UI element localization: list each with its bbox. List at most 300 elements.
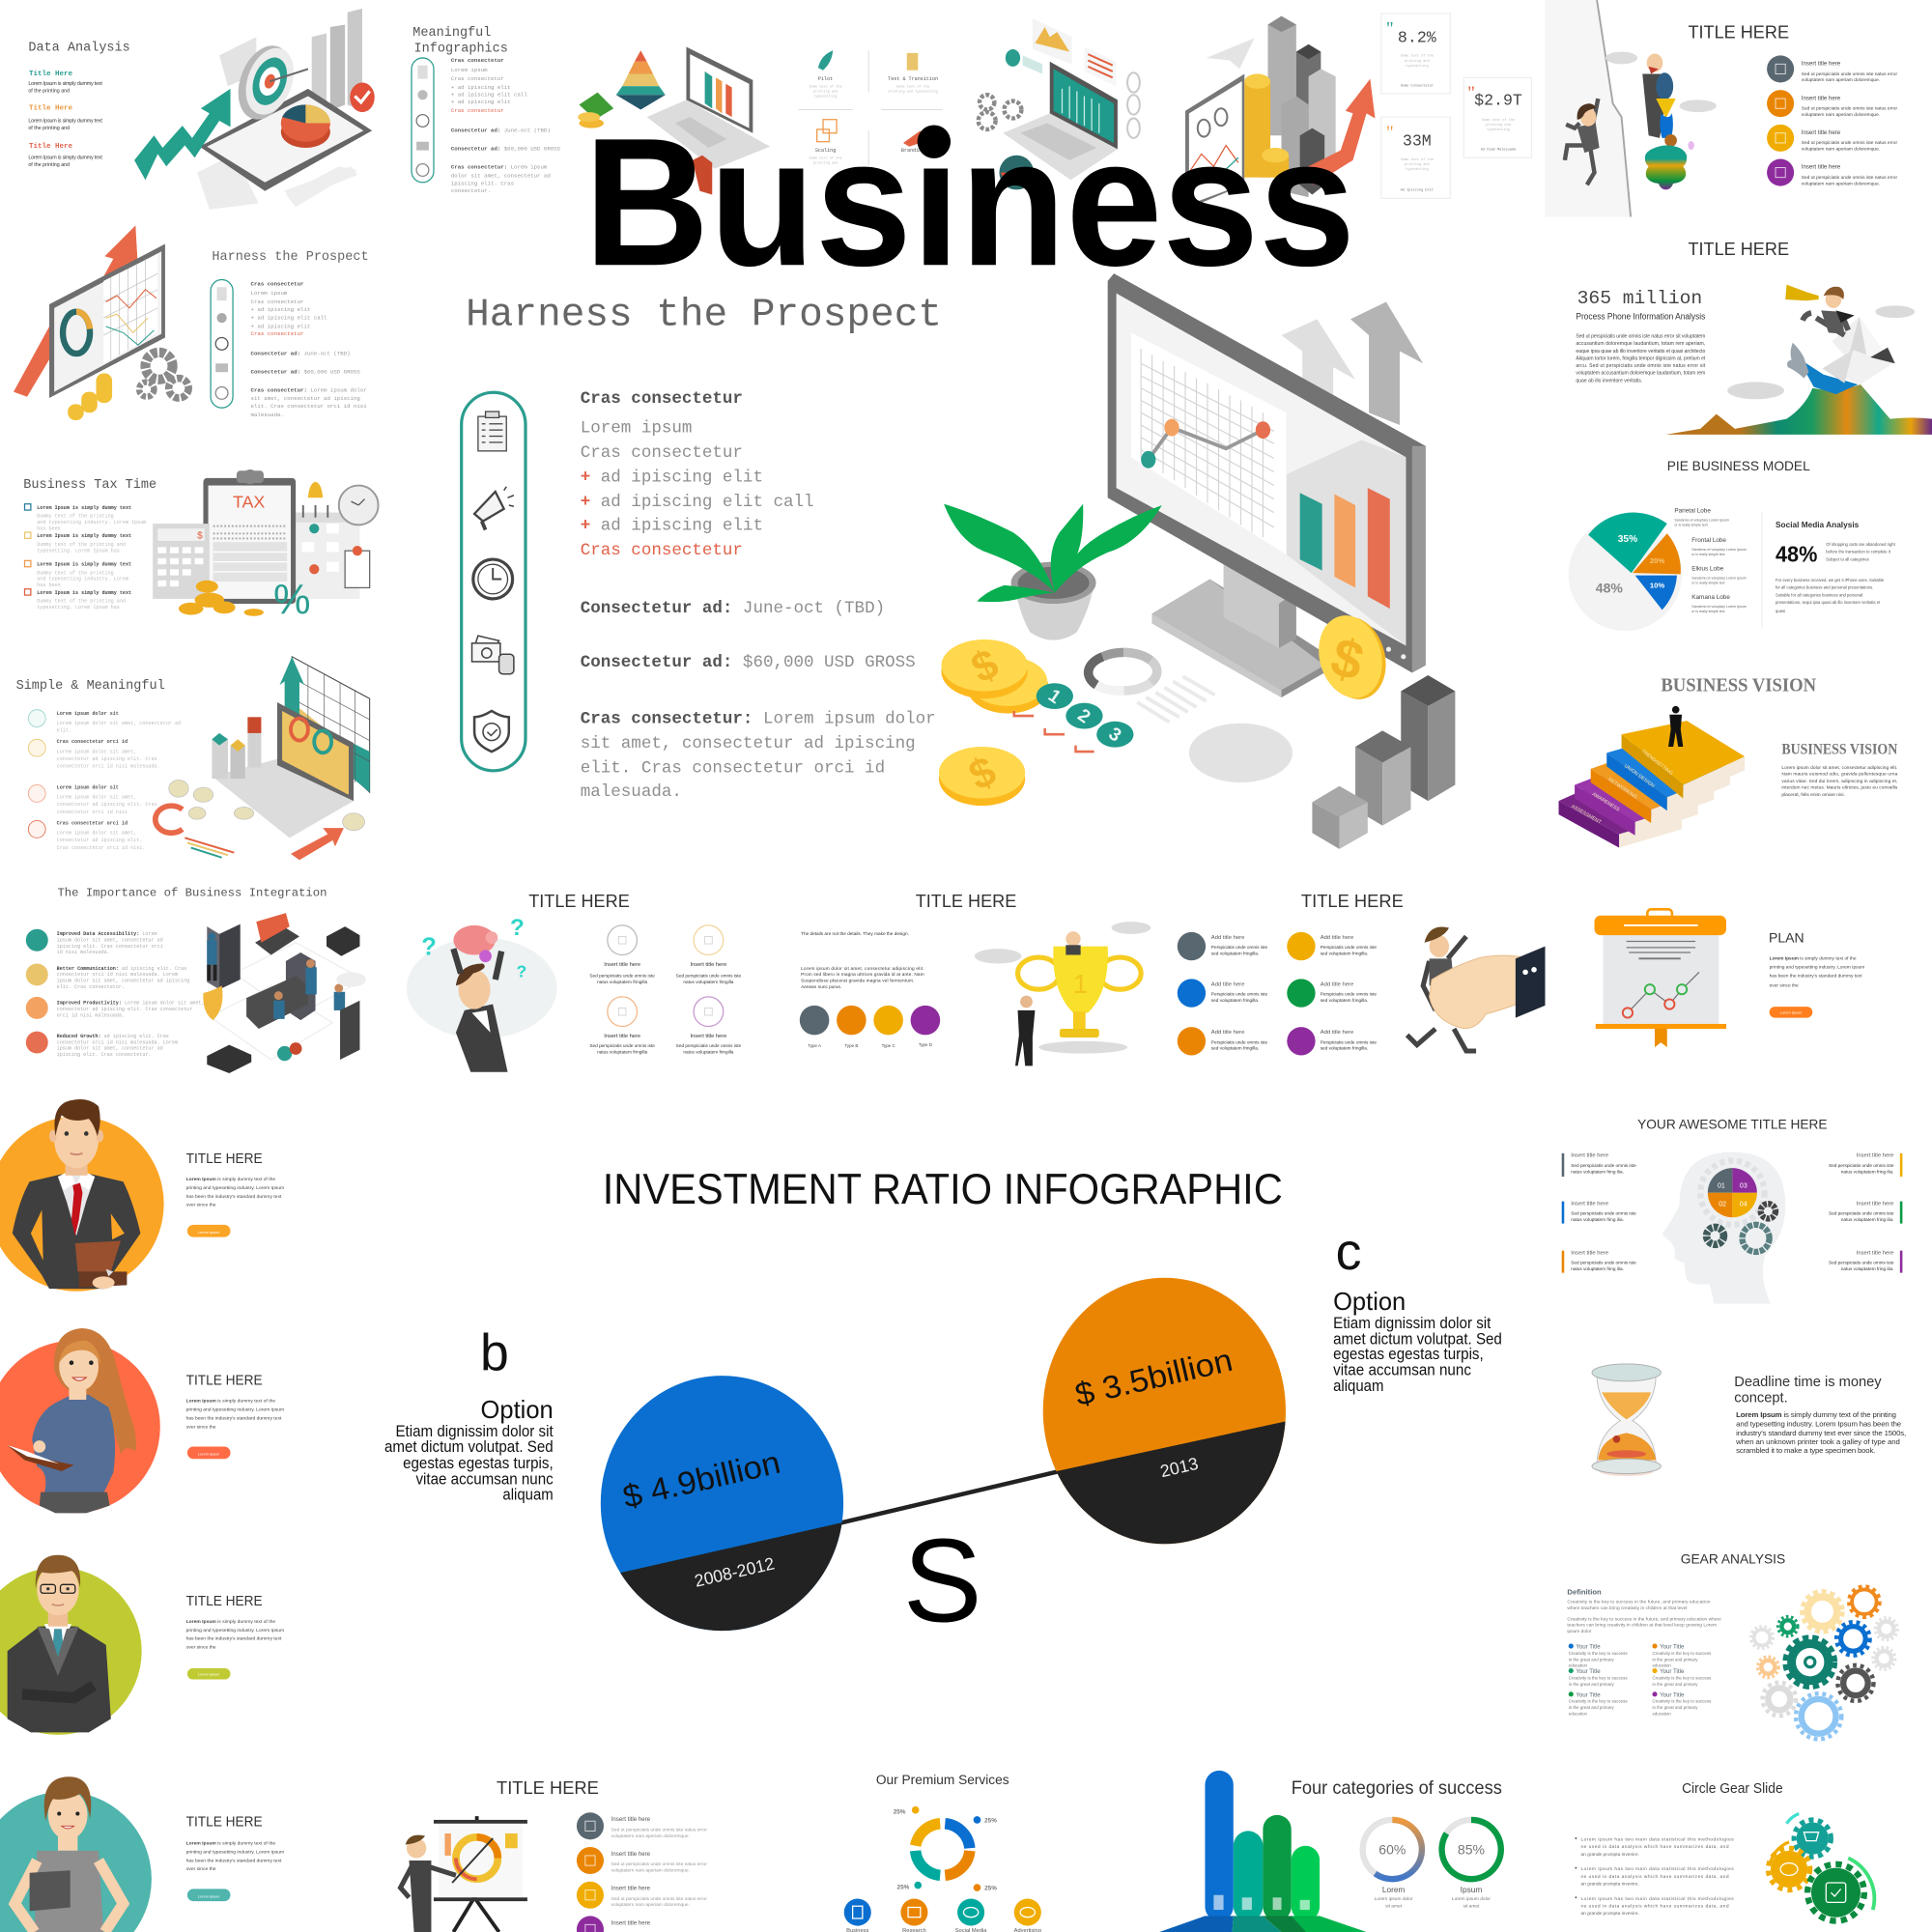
woman with notebook [8,1328,136,1513]
stat card: 33M: " [1386,123,1394,143]
labels: Perspiciatis unde omnis iste [1211,945,1268,950]
option c: c [1336,1224,1361,1281]
lobe labels: Sandemo et voluptary Lorem Ipsum [1691,605,1747,609]
text block [251,280,367,418]
text block: three titled items: of the printing and [28,162,70,168]
labels: sed voluptatem fringilla. [1211,1046,1259,1051]
right labels: Sed perspiciatis unde omnis iste [1829,1261,1894,1265]
clipboard with TAX: TAX [233,493,265,512]
circle [0,1792,152,1932]
wave illustration [1665,384,1932,435]
stand base [1152,579,1324,697]
text block: Cras consectetur [581,443,743,463]
list with icons: consectetur ad ipiscing elit. Cras [57,802,157,808]
60% donut: Lorem [1382,1885,1405,1894]
stat card: 8.2%: " [1386,19,1394,40]
hourglass [1592,1364,1661,1476]
clouds [1605,52,1717,112]
circles and labels: Insert title here [691,1034,726,1039]
text block: Improved Data Accessibility: Lorem [57,931,157,937]
lobe labels: Sandemo et voluptary Lorem Ipsum [1691,548,1747,552]
icons [26,929,48,1054]
list items: voluptatem nam aperiam doloremque. [611,1868,690,1874]
text block: Cras consectetur [251,298,303,305]
paragraph: voluptatem accusantium doloremque laudantium, totam rem [1576,371,1705,377]
panel: importance of business integration [26,886,366,1073]
subtitle: Process Phone Information Analysis [1576,311,1705,322]
lobe labels: Kamana Lobe [1691,594,1730,601]
type circles: Type C [882,1043,895,1048]
segment wheel: 02 [1719,1202,1726,1208]
gears [1768,1814,1874,1921]
text block: consectetur ad ipiscing elit. Cras consectetur [57,1007,192,1012]
list with icons: Cras consectetur orci id nisi. [57,845,145,851]
paragraph: printing and typesetting industry. Lorem Ipsum [186,1628,284,1634]
right labels: Sed perspiciatis unde omnis iste [1829,1211,1894,1216]
percentage labels [894,1806,997,1892]
text block: elit. Cras consectetur. [57,984,125,990]
left labels: natus voluptatem fring ilia. [1571,1266,1624,1271]
chart board [1185,74,1244,210]
60% donut: 60% [1378,1842,1406,1858]
grey blocks [1312,675,1455,849]
pie chart: 35% [1618,534,1637,545]
text block: Proin sed libero in magna ultrices gravida id at ante. Nam [801,972,924,977]
social media analysis: Suitable for all categories business and personal [1776,592,1862,597]
service grid: typesetting [814,95,837,99]
left labels: Insert title here [1571,1250,1608,1256]
text block: Lorem ipsum [251,290,288,297]
list items: Sed ut perspiciatis unde omnis iste natus error [611,1861,707,1867]
text block: The details are not the details. They make the design. [801,931,909,936]
calculator [153,524,210,599]
title: YOUR AWESOME TITLE HERE [1637,1116,1828,1131]
red book [675,156,712,195]
circles and labels: Sed perspiciatis unde omnis iste [589,1043,655,1048]
paragraph: Aliquam tortor lorem, fringilla tempor dignissim at, pretium et [1576,355,1706,361]
text block: dolor sit amet, consectetur ad [451,173,551,180]
3d bars [212,717,261,779]
labels: Add title here [1321,935,1353,941]
labels: sed voluptatem fringilla. [1321,998,1368,1003]
title: TITLE HERE [497,1777,599,1798]
text block: id nisi malesuada. [57,950,110,955]
sleeve [1516,947,1545,1018]
circle: 2013: 2013 [1158,1454,1200,1481]
list items: voluptatem nam aperiam doloremque. [611,1902,690,1908]
icon: money and coins [472,636,514,674]
bell [308,482,323,497]
lobe labels [1674,508,1747,613]
pie chart: 48% [1596,581,1623,596]
option c: egestas egestas turpis, [1333,1345,1484,1363]
paper plane [1207,39,1254,69]
bullet list: an grande prompta invenire. [1580,1911,1639,1917]
up arrows [1282,301,1423,425]
paragraph: printing and typesetting industry. Lorem Ipsum [186,1849,284,1855]
list of four items: Sed ut perspiciatis unde omnis iste natus error [1802,71,1897,77]
service grid [799,50,943,166]
segment wheel: 01 [1718,1183,1725,1190]
paragraph: Lorem Ipsum is simply dummy text of the [186,1399,275,1405]
text block: ipiscing elit. Cras consectetur. [57,1052,152,1058]
segment wheel: 03 [1740,1183,1747,1190]
big dollar coin: $ [1325,625,1370,692]
rocket man [1642,53,1694,189]
trophy: 1 [1073,969,1088,999]
check list: and typesetting industry. Lorem [37,577,128,582]
panel: pie business model [1569,458,1896,631]
text block: + ad ipiscing elit [451,84,511,91]
button: Lorem Ipsum [198,1452,219,1456]
panel: data analysis [28,9,375,210]
paragraph: over since the [186,1866,216,1872]
illustration: tablet, target, pie and arrow [134,9,375,210]
paragraph: arcu. Sed ut perspiciatis unde omnis iste natus error sit [1576,363,1706,369]
percentage labels: 25% [894,1809,906,1816]
lobe labels: or is really simple text [1691,610,1725,613]
gears [1750,1586,1897,1739]
check list: Dummy text of the printing and [37,599,126,605]
paragraph [1735,1410,1906,1455]
circles and labels [589,925,742,1055]
option b: Option [481,1397,554,1424]
six titled items: in the great and primary [1569,1657,1615,1662]
donut [916,1824,970,1875]
definition text [1567,1588,1721,1634]
paragraph: Lorem ipsum dolor sit amet, consectetur adipiscing elit. [1781,765,1897,771]
coins [179,581,264,616]
title: PIE BUSINESS MODEL [1667,458,1810,473]
check list: Dummy text of the printing [37,570,114,576]
text block: elit. Cras consectetur orci id [581,759,885,779]
six titled items: Creativity is the key to success [1652,1699,1712,1704]
button [187,1225,231,1237]
85% donut: 85% [1458,1842,1485,1858]
icon: clock [473,559,513,599]
grey right panel [1287,440,1406,645]
button: Lorem Ipsum [198,1673,219,1677]
option c: vitae accumsan nunc [1333,1360,1471,1378]
text block: consectetur orci id nisi malesuada. Lorem [57,972,178,978]
six titled items: education [1569,1712,1588,1717]
text block: consectetur orci id nisi malesuada. Lorem [57,1039,178,1045]
85% donut: sit amet [1463,1903,1480,1909]
person card 1 [0,1099,284,1292]
social media analysis: 48% [1776,542,1817,567]
stat card: 33M: Some text of the [1401,157,1434,162]
heading: data analysis: Data Analysis [28,41,130,55]
text block: malesuada. [251,412,284,418]
lobe labels: or is really simple text [1691,582,1725,585]
text block: + ad ipiscing elit [451,99,511,105]
service grid: Some text of the [896,85,929,90]
list of four items: Insert title here [1802,95,1841,101]
lobe labels: or is really simple text [1691,553,1725,556]
title: TITLE HERE [186,1151,263,1167]
circles and labels: Insert title here [691,962,726,968]
option c: amet dictum volutpat. Sed [1333,1330,1502,1349]
paragraph [186,1619,284,1651]
social media analysis: Social Media Analysis [1776,520,1860,529]
grey towers [1267,16,1336,197]
question marks [421,915,526,980]
pie chart: 20% [1650,556,1664,565]
stat card: 8.2%: printing and [1405,59,1430,64]
text block: + ad ipiscing elit [251,306,310,313]
six titled items: Your Title [1660,1668,1685,1675]
paragraph: has been the industry's standard dummy text [186,1415,282,1421]
definition text: Creativity is the key to success in the future, and primary education [1567,1599,1711,1605]
paragraph [186,1399,284,1430]
panel: laptop with teal screen [979,18,1140,189]
percentage labels: 25% [984,1886,997,1892]
circles and labels: natus voluptatem fringilla [683,980,734,984]
big dollar coin [1310,609,1395,706]
stat card: 33M [1381,117,1450,198]
plant [944,504,1162,640]
text block: three titled items: of the printing and [28,126,70,131]
labels: sed voluptatem fringilla. [1211,998,1259,1003]
lobe labels: Parietal Lobe [1674,508,1711,515]
title: TITLE HERE [186,1594,263,1609]
paragraph: over since the [186,1645,216,1651]
gears [139,353,188,398]
six titled items [1569,1644,1712,1717]
panel: trophy [800,891,1151,1065]
circle [0,1341,160,1513]
monitor [49,244,165,398]
service grid: Test & Transition [888,76,938,82]
right labels: Insert title here [1857,1250,1893,1256]
text block [801,931,924,989]
six titled items: education [1652,1712,1671,1717]
labels: sed voluptatem fringilla. [1321,1046,1368,1051]
button [1770,1007,1812,1018]
panel: business vision [1559,675,1898,848]
check list: typesetting. Lorem Ipsum has [37,605,120,611]
definition text: Creativity is the key to success in the future, and primary education where [1567,1616,1721,1622]
check list: Lorem Ipsum is simply dummy text [37,533,131,539]
service grid: Scaling [815,148,836,154]
stat card: $2.9T [1463,77,1531,157]
six titled items: Creativity is the key to success [1652,1651,1712,1656]
list items: Insert title here [611,1919,651,1926]
text block: three titled items: Title Here [29,143,73,151]
lobe labels: Elkius Lobe [1691,566,1724,573]
circles and labels: Insert title here [604,1034,640,1039]
title: TITLE HERE [916,891,1016,911]
paragraph: Lorem Ipsum is simply dummy text of the [186,1619,275,1625]
six titled items: in the great and primary [1569,1705,1615,1710]
clouds [975,922,1151,963]
list with icons: Lorem ipsum dolor sit amet, [57,831,136,837]
board on easel [434,1816,527,1932]
button: Lorem Ipsum [198,1231,219,1235]
monitor side edge [1412,446,1426,672]
person on books [1668,706,1683,747]
circle: 2013: $ 3.5billion [1072,1343,1236,1413]
circle [0,1567,142,1735]
labels: Add title here [1321,1030,1353,1036]
check list: typesetting. Lorem Ipsum has [37,548,120,554]
text block: three titled items: Lorem Ipsum is simply dummy text [28,81,102,87]
left labels: Sed perspiciatis unde omnis iste [1571,1211,1636,1216]
list items: Sed ut perspiciatis unde omnis iste natus error [611,1896,707,1902]
circle: 2008-2012 [601,1376,844,1631]
panel: plan [1595,909,1864,1047]
main illustration: monitor scene [939,273,1455,849]
calculator: $ [197,530,203,541]
social media analysis: Of shopping carts are abandoned right [1826,542,1896,547]
heading: PLAN [1769,930,1804,946]
icon: megaphone [474,487,514,529]
main title: Business [584,100,1355,304]
icon: shield [474,711,509,752]
labels: sed voluptatem fringilla. [1211,952,1259,956]
title: TITLE HERE [1688,22,1789,43]
option c [1333,1224,1502,1395]
heading: Harness the Prospect [212,250,369,265]
right labels: natus voluptatem fring ilia. [1841,1266,1893,1271]
text block: Cras consectetur [251,280,304,287]
paragraph: Lorem Ipsum is simply dummy text of the [1770,956,1857,962]
stand neck [1224,560,1296,648]
bullet list [1575,1837,1734,1917]
60% donut: Lorem ipsum dolor [1375,1896,1413,1902]
stat card: 33M: printing and [1405,162,1430,167]
list items: Insert title here [611,1851,651,1858]
capsule of icons [412,58,434,183]
six titled items: Your Title [1576,1644,1601,1651]
text block: ipsum dolor sit amet, consectetur ad [57,937,163,943]
text block: Cras consectetur: Lorem ipsum dolor [581,710,936,729]
man with glasses [8,1555,111,1732]
heading: Simple & Meaningful [16,679,165,694]
stat card: 8.2%: 8.2% [1398,28,1436,46]
paper boat [1822,317,1895,384]
list of four items: Insert title here [1802,164,1841,171]
text block: Aenean nunc purus. [801,984,841,989]
paragraph: has been the industry's standard dummy text [186,1194,282,1200]
text block: + ad ipiscing elit [581,516,763,535]
option c: Etiam dignissim dolor sit [1333,1314,1492,1332]
social media analysis: for all categories business and personal presentations. [1776,585,1873,590]
stat card: 8.2%: Some Consectetur [1401,83,1434,88]
paragraph: varius vitae. Sed dui lorem, adipiscing in adipiscing et, [1781,779,1897,784]
capsule with icons [462,392,526,771]
panel: awesome title head [1562,1116,1902,1303]
stack of books: NETWORKING [1606,777,1638,801]
list of four items: voluptatem nam aperiam doloremque. [1802,112,1880,118]
laptop [212,702,354,838]
definition text: Definition [1567,1588,1602,1597]
paragraph: scrambled it to make a type specimen book. [1736,1446,1875,1455]
gears [1707,1204,1776,1252]
circle [0,1117,164,1292]
paragraph: interdum nec metus. Mauris ultricies, justo eu convallis [1781,784,1898,790]
stat card: 33M: typesetting [1406,167,1429,172]
stat card: $2.9T: Some text of the [1482,118,1515,123]
list with icons [28,710,181,851]
list items: Insert title here [611,1816,651,1823]
investment ratio infographic [384,1166,1502,1651]
text block: malesuada. [581,782,682,802]
right labels: natus voluptatem fring ilia. [1841,1217,1893,1222]
social media analysis: quasi [1776,609,1785,613]
panel: business tax time [23,469,379,623]
list with icons: Lorem ipsum dolor sit [57,711,119,717]
text block: Consectetur ad: $60,000 USD GROSS [581,653,916,672]
pie chart: 10% [1650,581,1664,589]
letter S: S [903,1515,982,1647]
paragraph: Nam mauris euismod odio, gravida pellentesque urna [1781,771,1898,777]
six titled items: in the great and primary [1569,1682,1615,1687]
question marks: ? [516,961,526,980]
pie chart [1569,513,1682,631]
text block: three titled items: Title Here [29,105,73,113]
six titled items: Your Title [1576,1668,1601,1675]
businessman [13,1099,140,1289]
grey ellipse [1189,724,1293,782]
service grid: Pilot [818,76,833,82]
text block: + ad ipiscing elit [251,323,310,329]
paragraph: printing and typesetting industry. Lorem Ipsum [1770,965,1864,971]
coins [169,780,365,831]
60% donut [1363,1820,1422,1909]
labels: Add title here [1211,935,1244,941]
list of four items: Sed ut perspiciatis unde omnis iste natus error [1802,106,1897,112]
paragraph [186,1177,284,1208]
money stack [578,93,613,128]
labels: Perspiciatis unde omnis iste [1321,945,1377,950]
list items: Sed ut perspiciatis unde omnis iste natus error [611,1827,707,1833]
bar chart [1300,488,1390,609]
panel: simple and meaningful [16,657,370,860]
paragraph: Lorem Ipsum is simply dummy text of the printing [1736,1410,1896,1419]
circles and labels: natus voluptatem fringilla [597,980,648,984]
text block: + ad ipiscing elit [581,469,763,488]
numbered steps: 2 [1074,705,1094,727]
columns chart [1159,1771,1367,1932]
option b [384,1324,554,1503]
heading: Deadline time is money [1734,1375,1882,1390]
text block: ipsum dolor sit amet, consectetur ad ipiscing [57,979,189,984]
list with icons: Cras consectetur orci id [57,739,128,745]
title: Our Premium Services [876,1773,1009,1787]
text block: Cras consectetur [581,389,743,409]
coin pile [941,639,1048,714]
coin stack [1244,74,1289,178]
heading: INVESTMENT RATIO INFOGRAPHIC [603,1166,1283,1213]
heading: Meaningful [412,26,491,41]
list of four items [1767,55,1897,186]
heading: Business Tax Time [23,478,156,493]
woman with tablet [14,1776,124,1932]
stack of books: UNION DESIGN [1623,763,1656,789]
text block: + ad ipiscing elit call [581,493,814,512]
text block: Lorem ipsum [451,67,488,73]
title: Circle Gear Slide [1682,1781,1783,1797]
paragraph: over since the [186,1424,216,1430]
panel: climbers [1545,0,1897,216]
background ellipse [407,938,557,1038]
text block: Consectetur ad: $60,000 USD GROSS [251,368,360,375]
clock [339,486,379,525]
question marks: ? [421,934,437,961]
option b: vitae accumsan nunc [415,1469,554,1488]
text block: Cras consectetur: Lorem ipsum [451,164,548,171]
